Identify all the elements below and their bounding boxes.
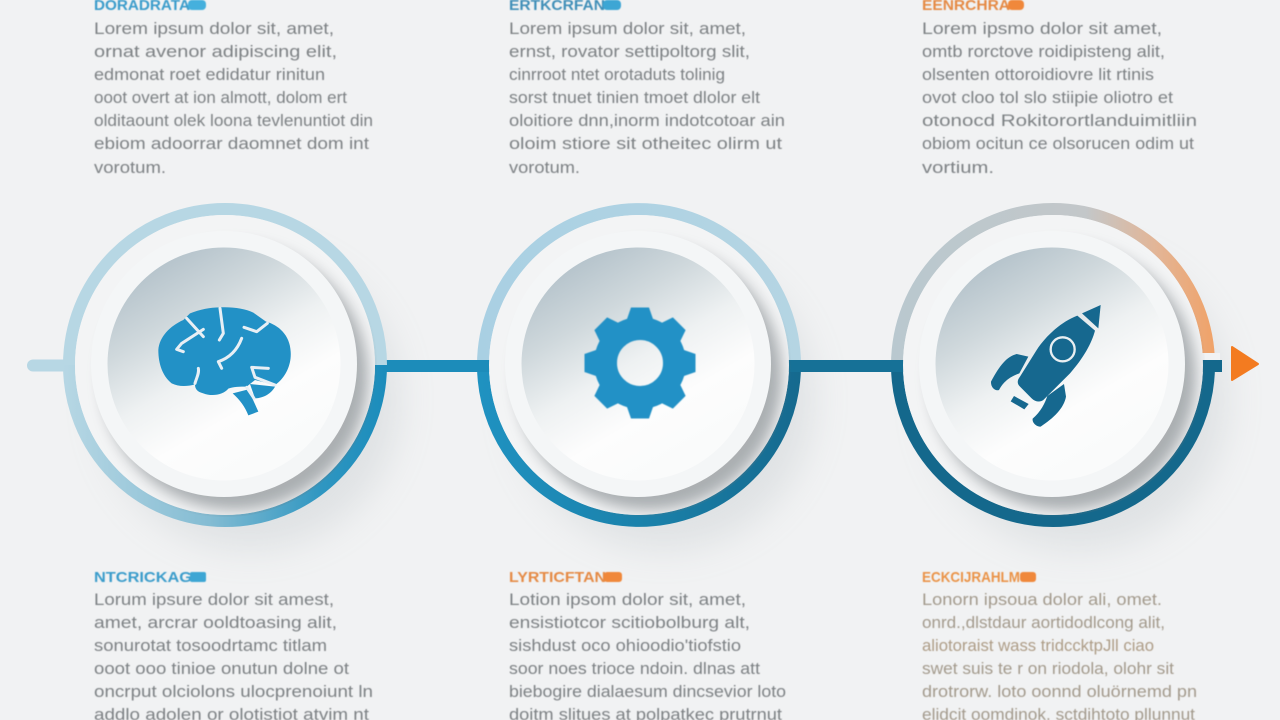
paragraph top 3: olsenten ottoroidiovre lit rtinis bbox=[922, 66, 1154, 84]
icon: brain bbox=[158, 307, 291, 415]
circle step 2: gear bbox=[470, 209, 808, 521]
bowl 3 bbox=[936, 248, 1168, 480]
paragraph top 1: olditaount olek loona tevlenuntiot din bbox=[94, 112, 373, 130]
top text block 1 bbox=[94, 0, 373, 177]
disc 3 bbox=[903, 215, 1203, 515]
paragraph top 1: Lorem ipsum dolor sit, amet, bbox=[94, 20, 334, 38]
paragraph top 2: oloim stiore sit otheitec olirm ut bbox=[509, 135, 782, 153]
ring upper 3 bbox=[897, 209, 1209, 365]
heading bottom 2: LYRTICFTAN bbox=[509, 569, 606, 586]
paragraph top 1 bbox=[94, 20, 373, 177]
connector 1 to 2 bbox=[381, 360, 479, 372]
connector 2 cap over ring 2 bbox=[788, 360, 808, 372]
ring lower 3 bbox=[897, 365, 1209, 521]
circle step 1: brain bbox=[69, 209, 381, 521]
paragraph bottom 3 bbox=[922, 591, 1197, 720]
left stub line bbox=[33, 360, 66, 372]
paragraph bottom 1 bbox=[94, 591, 373, 720]
paragraph bottom 2 bbox=[509, 591, 786, 720]
icon: rocket bbox=[991, 305, 1101, 427]
paragraph bottom 2: biebogire dialaesum dincsevior loto bbox=[509, 683, 786, 701]
paragraph bottom 1: amet, arcrar ooldtoasing alit, bbox=[94, 614, 337, 632]
paragraph top 2: oloitiore dnn,inorm indotcotoar ain bbox=[509, 112, 785, 130]
paragraph bottom 3: onrd.,dlstdaur aortidodlcong alit, bbox=[922, 614, 1165, 632]
soft shadows under the circles bbox=[100, 250, 1228, 550]
plate 1 bbox=[91, 231, 357, 497]
paragraph bottom 3: Lonorn ipsoua dolor ali, omet. bbox=[922, 591, 1162, 609]
top text block 3 bbox=[922, 0, 1197, 177]
paragraph top 3 bbox=[922, 20, 1197, 177]
disc shadow 1 bbox=[102, 244, 368, 510]
disc 1 bbox=[75, 215, 375, 515]
paragraph top 2: Lorem ipsum dolor sit, amet, bbox=[509, 20, 746, 38]
heading bottom 3: ECKCIJRAHLM bbox=[922, 569, 1020, 586]
paragraph top 3: Lorem ipsmo dolor sit amet, bbox=[922, 20, 1162, 38]
paragraph bottom 2: soor noes trioce ndoin. dlnas att bbox=[509, 660, 760, 678]
paragraph bottom 1: sonurotat tosoodrtamc titlam bbox=[94, 637, 327, 655]
paragraph top 2: cinrroot ntet orotaduts tolinig bbox=[509, 66, 725, 84]
bottom text block 1 bbox=[94, 569, 373, 720]
ring upper 1 bbox=[69, 209, 381, 365]
paragraph top 1: edmonat roet edidatur rinitun bbox=[94, 66, 325, 84]
ring upper 2 bbox=[483, 209, 795, 365]
paragraph bottom 2: Lotion ipsom dolor sit, amet, bbox=[509, 591, 746, 609]
bowl 1 bbox=[108, 248, 340, 480]
paragraph top 3: otonocd Rokitorortlanduimitliin bbox=[922, 112, 1197, 130]
paragraph bottom 3: swet suis te r on riodola, olohr sit bbox=[922, 660, 1174, 678]
paragraph top 1: ornat avenor adipiscing elit, bbox=[94, 43, 337, 61]
heading bottom 1: NTCRICKAG bbox=[94, 569, 192, 586]
bowl 2 bbox=[522, 248, 754, 480]
disc shadow 3 bbox=[930, 244, 1196, 510]
disc shadow 2 bbox=[516, 244, 782, 510]
paragraph top 2 bbox=[509, 20, 785, 177]
paragraph bottom 3: aliotoraist wass tridccktpJll ciao bbox=[922, 637, 1154, 655]
ring lower 1 bbox=[69, 365, 381, 521]
paragraph top 3: obiom ocitun ce olsorucen odim ut bbox=[922, 135, 1194, 153]
arrow: orange end marker bbox=[1232, 347, 1258, 380]
paragraph bottom 2: ensistiotcor scitiobolburg alt, bbox=[509, 614, 750, 632]
paragraph bottom 1: Lorum ipsure dolor sit amest, bbox=[94, 591, 334, 609]
paragraph top 3: omtb rorctove roidipisteng alit, bbox=[922, 43, 1165, 61]
plate 2 bbox=[505, 231, 771, 497]
paragraph top 3: vortium. bbox=[922, 159, 994, 177]
paragraph top 1: ebiom adoorrar daomnet dom int bbox=[94, 135, 369, 153]
paragraph top 1: ooot overt at ion almott, dolom ert bbox=[94, 89, 347, 107]
paragraph top 2: ernst, rovator settipoltorg slit, bbox=[509, 43, 750, 61]
plate 3 bbox=[919, 231, 1185, 497]
paragraph bottom 1: oncrput olciolons ulocprenoiunt ln bbox=[94, 683, 373, 701]
paragraph top 2: sorst tnuet tinien tmoet dlolor elt bbox=[509, 89, 760, 107]
circle step 3: rocket bbox=[884, 209, 1222, 521]
connector 2 to 3 bbox=[795, 360, 893, 372]
top text block 2 bbox=[509, 0, 785, 177]
paragraph bottom 2: sishdust oco ohioodio'tiofstio bbox=[509, 637, 741, 655]
icon: gear bbox=[584, 308, 696, 418]
paragraph top 3: ovot cloo tol slo stiipie oliotro et bbox=[922, 89, 1173, 107]
ring lower 2 bbox=[483, 365, 795, 521]
bottom text block 3 bbox=[922, 569, 1197, 720]
disc 2 bbox=[489, 215, 789, 515]
gap above right line of ring 3 bbox=[1200, 353, 1220, 360]
paragraph top 2: vorotum. bbox=[509, 159, 580, 177]
bottom text block 2 bbox=[509, 569, 786, 720]
connector 2 cap over ring 3 bbox=[884, 360, 904, 372]
paragraph bottom 3: drotrorw. loto oonnd oluörnemd pn bbox=[922, 683, 1197, 701]
connector 1 cap over ring 2 bbox=[470, 360, 490, 372]
paragraph top 1: vorotum. bbox=[94, 159, 166, 177]
paragraph bottom 1: ooot ooo tinioe onutun dolne ot bbox=[94, 660, 349, 678]
line stub right of ring 3 bbox=[1202, 360, 1222, 372]
